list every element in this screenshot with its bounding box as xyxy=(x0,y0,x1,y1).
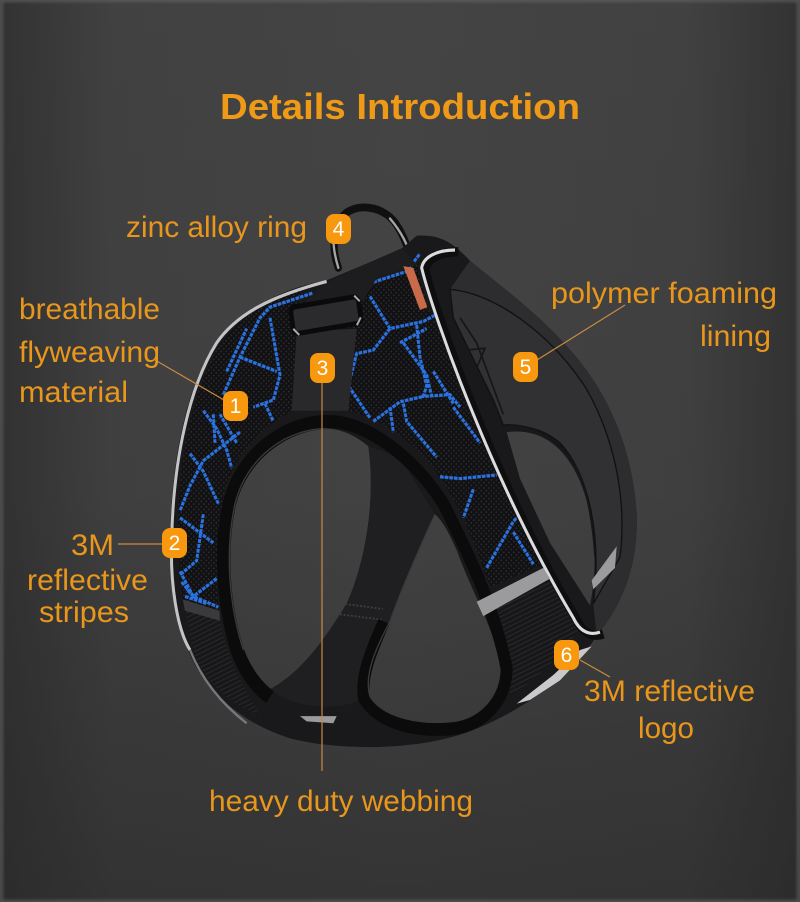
ribbed side panel xyxy=(185,579,582,714)
shoulder webbing xyxy=(297,248,417,311)
foam lining xyxy=(450,289,622,604)
badge 3 xyxy=(310,353,335,383)
printed mark on front strap xyxy=(300,716,337,723)
badge 2: 2 xyxy=(169,532,180,555)
outer shoulder band xyxy=(450,261,637,636)
badge 1 xyxy=(223,391,248,421)
leader lines xyxy=(118,305,625,771)
webbing strap xyxy=(292,329,357,411)
reflective piping right xyxy=(425,252,603,635)
reflective stripes xyxy=(477,546,617,616)
label: 3M reflective logo: 3M reflective xyxy=(584,675,755,708)
badge 5 xyxy=(513,352,538,382)
label: 3M reflective stripes: stripes xyxy=(39,596,129,629)
label: 3M reflective stripes xyxy=(27,529,148,629)
neck binding xyxy=(224,421,507,729)
lining fold xyxy=(460,318,595,557)
badge 2 xyxy=(162,528,187,558)
badge 4 xyxy=(326,214,351,244)
badge 3: 3 xyxy=(317,357,328,380)
reflective piping left xyxy=(171,281,327,723)
icon: zinc alloy D-ring xyxy=(334,207,410,268)
badge 6 xyxy=(554,640,579,670)
label: 3M reflective logo: logo xyxy=(638,712,694,745)
label: zinc alloy ring: zinc alloy ring xyxy=(126,211,307,244)
label: breathable flyweaving material: breathable xyxy=(19,293,160,326)
harness body silhouette xyxy=(170,235,637,747)
label: polymer foaming lining: lining xyxy=(700,320,771,353)
label: 3M reflective stripes: reflective xyxy=(27,564,148,597)
label: polymer foaming lining xyxy=(551,277,777,353)
lower strap xyxy=(270,446,435,707)
label: breathable flyweaving material xyxy=(19,293,160,409)
breathable mesh panel xyxy=(178,264,543,618)
badge 4: 4 xyxy=(333,218,345,241)
label: 3M reflective stripes: 3M xyxy=(71,529,114,562)
label: heavy duty webbing: heavy duty webbing xyxy=(209,785,473,818)
title: Details Introduction xyxy=(220,86,580,127)
reflective logo patch xyxy=(517,646,592,704)
badge 6: 6 xyxy=(561,644,572,667)
slider buckle xyxy=(290,295,363,336)
label: 3M reflective logo xyxy=(584,675,755,745)
badge 1: 1 xyxy=(230,395,241,418)
orange tag xyxy=(403,266,427,310)
blue flyweave pattern xyxy=(180,254,533,607)
frayed mesh edge xyxy=(183,599,220,621)
label: polymer foaming lining: polymer foaming xyxy=(551,277,777,310)
strap stitching xyxy=(340,604,383,620)
harness illustration xyxy=(170,207,637,747)
label: breathable flyweaving material: flyweaving xyxy=(19,336,160,369)
label: breathable flyweaving material: material xyxy=(19,376,128,409)
badge 5: 5 xyxy=(520,356,531,379)
